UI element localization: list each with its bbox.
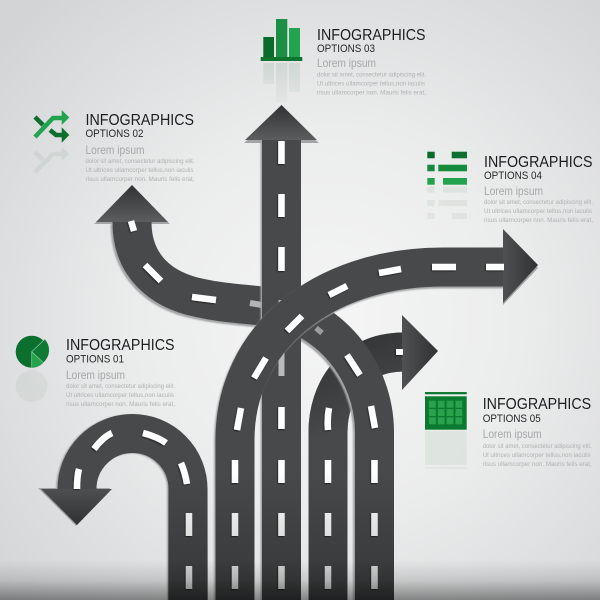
text block: options 03: dolor sit amet, consectetur adipiscing elit. — [317, 72, 426, 78]
bottom edge shadow — [0, 560, 600, 600]
icon: pie chart — [16, 336, 49, 402]
text block: options 02: risus ullamcorper non. Mauris felis erat, — [86, 176, 195, 183]
road: straight up arrow — [244, 105, 319, 600]
text block: options 05: dolor sit amet, consectetur adipiscing elit. — [483, 443, 592, 450]
text block: options 02: Lorem ipsum — [86, 143, 145, 157]
text block: options 01: INFOGRAPHICS — [66, 337, 174, 354]
text block: options 01: Lorem ipsum — [66, 368, 125, 382]
road darkening toward bottom — [168, 470, 394, 600]
icon: shuffle arrows — [35, 110, 69, 172]
text block: options 04 — [484, 154, 593, 224]
text block: options 03: INFOGRAPHICS — [317, 27, 426, 44]
text block: options 04: dolor sit amet, consectetur adipiscing elit. — [484, 199, 593, 206]
text block: options 05: OPTIONS 05 — [483, 413, 541, 425]
road: U-turn arrow down-left — [38, 433, 189, 600]
text block: options 03: OPTIONS 03 — [317, 43, 375, 55]
text block: options 03: Lorem ipsum — [317, 56, 376, 70]
text block: options 04: risus ullamcorper non. Mauris felis erat, — [484, 217, 593, 224]
text block: options 05: Ut ultrices ullamcorper tellus,non iaculis — [483, 452, 591, 459]
road: arch to short right arrow — [328, 315, 438, 600]
text block: options 04: Lorem ipsum — [484, 184, 543, 198]
text block: options 01: Ut ultrices ullamcorper tellus,non iaculis — [66, 392, 174, 399]
text block: options 03: risus ullamcorper non. Mauris felis erat, — [317, 90, 426, 96]
text block: options 04: OPTIONS 04 — [484, 170, 542, 182]
text block: options 05 — [483, 396, 592, 468]
text block: options 01: risus ullamcorper non. Mauris felis erat, — [66, 401, 175, 408]
icon: bar chart — [261, 19, 302, 102]
text block: options 03: Ut ultrices ullamcorper tellus,non iaculis — [317, 80, 425, 88]
text block: options 02: Ut ultrices ullamcorper tellus,non iaculis — [86, 167, 194, 174]
text block: options 02: INFOGRAPHICS — [86, 112, 194, 129]
text block: options 01 — [66, 337, 175, 408]
text block: options 02: dolor sit amet, consectetur adipiscing elit. — [86, 158, 195, 165]
icon: list — [427, 152, 467, 219]
text block: options 05: Lorem ipsum — [483, 427, 542, 441]
icon: calendar grid — [425, 392, 467, 469]
text block: options 01: dolor sit amet, consectetur adipiscing elit. — [66, 383, 175, 390]
text block: options 01: OPTIONS 01 — [66, 354, 124, 366]
text block: options 04: Ut ultrices ullamcorper tellus,non iaculis — [484, 208, 592, 215]
road: large curve to right arrow — [234, 229, 538, 600]
text block: options 02 — [86, 112, 195, 183]
text block: options 02: OPTIONS 02 — [86, 128, 144, 140]
text block: options 05: risus ullamcorper non. Mauris felis erat, — [483, 461, 592, 468]
road: S-curve to upper-left arrow — [94, 185, 375, 600]
text block: options 03 — [317, 27, 426, 96]
